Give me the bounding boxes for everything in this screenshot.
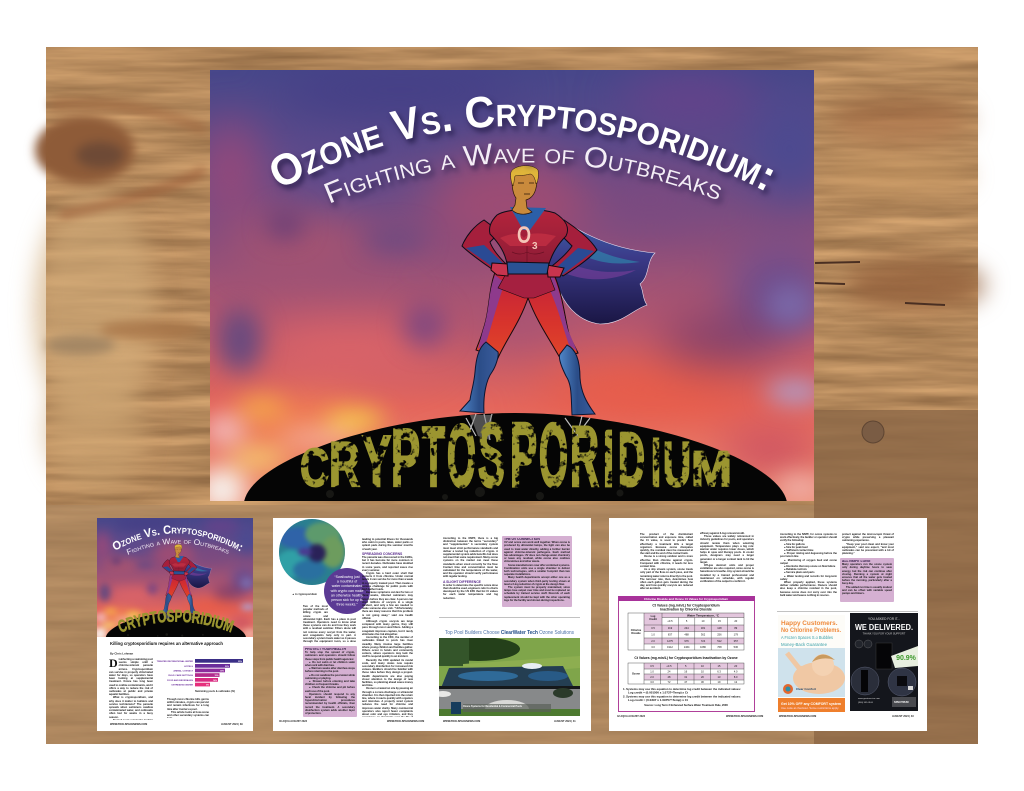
body text: second column with subheading: Although crypto oocysts are large compared with many germs, they still pass through most sand filters. Adding a coagulant improves capture, but it rarely eliminates the risk altogether. xyxy=(362,620,413,636)
subtitle: Fighting a Wave of Outbreaks xyxy=(324,144,724,208)
mound lettering: CRYPTOSPORIDIUM: O xyxy=(539,405,568,505)
callout circle xyxy=(324,568,370,614)
chlorine dioxide table: 179 xyxy=(734,632,739,636)
chlorine dioxide table: 637 xyxy=(668,632,673,636)
table notes xyxy=(623,687,741,707)
ozone table: 19 xyxy=(718,680,721,684)
pool advertisement xyxy=(435,617,580,718)
cover image: Fighting a Wave of Outbreaks xyxy=(126,538,229,555)
chlorine dioxide table: 256 xyxy=(717,632,722,636)
chlorine dioxide table: 3.0 xyxy=(651,645,655,649)
body text: right page column 2 xyxy=(842,533,894,555)
pool advertisement: Ozone Systems for Residential & Commercial Pools xyxy=(463,705,523,708)
spread 2: article pages 42 and 43 xyxy=(609,518,927,731)
advert: we delivered: www.greatservice.com xyxy=(858,697,880,700)
page footers: AUGUST 2024 | 41 xyxy=(554,720,576,723)
hero illustration: superhero standing on the Cryptosporidium mound xyxy=(210,70,814,505)
callout circle: person sick for up to xyxy=(331,598,363,602)
sidebar: protect your health: ● Wait two weeks after diarrhea stops before returning to the pool. xyxy=(305,667,355,673)
ozone table: 10 xyxy=(701,664,704,668)
body text: left page column 2: These values are widely referenced in industry guidelines for pools, and operators should review them when selecting equipment. Temperature plays a big role: warmer water requires lower doses, which helps in spas and therapy pools. In cooler pools, designers may need a larger generator or a longer contact tank to hit the target. xyxy=(700,535,754,564)
ozone table: 20 xyxy=(734,664,738,668)
chlorine dioxide table: 976 xyxy=(684,639,689,643)
body text: second column with subheading: Because symptoms can last for two or three weeks, infected swimmers may return before they are clear. A person can shed millions of oocysts in a single incident, and only a few are needed to make someone else sick. “Unfortunately, there are many reasons that this problem is not going away,” said one health official. xyxy=(362,591,413,620)
page footers: 42 AQUA AUGUST 2024 xyxy=(617,715,646,718)
bar chart: outbreak settings xyxy=(157,659,243,693)
chlorine dioxide table: 5 xyxy=(686,619,688,623)
mound lettering: CRYPTOSPORIDIUM: P xyxy=(391,412,420,504)
bar chart: outbreak settings: HOTELS xyxy=(184,666,194,668)
ozone table: 30 xyxy=(701,680,704,684)
advert: we delivered xyxy=(850,613,918,711)
body text: left page column 1 xyxy=(640,533,693,589)
body text: second column with subheading: leading to potential illness for thousands who swim in pools, lakes, water parks or splash pads during the summer months of each year. The parasite was discovered in the 1900s, but it has become far more common in recent decades. Outbreaks have doubled in some years, and reported cases rise every summer. xyxy=(362,538,413,572)
chlorine dioxide table: 536 xyxy=(734,645,739,649)
chlorine dioxide table: Water Temperature, °C xyxy=(687,613,720,617)
ozone table: 48 xyxy=(668,675,671,679)
body text: right page column 1: ● Size for peak load xyxy=(784,546,808,549)
body text: second column with subheading: SPREADING CONCERNS xyxy=(362,552,402,556)
sidebar: all night long: The added run time is usually modest and can be offset with variable speed pumps and timers. xyxy=(842,586,892,595)
photo caption: ▲ A cryptosporidium xyxy=(292,593,318,596)
sidebar: the UV connection: Many health departments accept either one as a secondary system when third-party testing shows at least a 3-log reduction of crypto at the design flow. xyxy=(504,576,570,586)
callout circle: with crypto can make xyxy=(331,589,363,593)
advert: we delivered: WE DELIVERED. xyxy=(855,622,913,632)
table notes: Log credit = (0.001506 x 1.0737^Temp) x Ct xyxy=(628,690,688,694)
body text: right page column 2: “Keep your pool clean and know your equipment,” said one expert, “and most outbreaks can be prevented with a bit of planning.” xyxy=(842,543,894,555)
sidebar: protect your health xyxy=(303,646,357,717)
page footers: AUGUST 2024 | 43 xyxy=(892,715,914,718)
title: Ozone Vs. Cryptosporidium: xyxy=(271,96,778,196)
chlorine dioxide table: Dioxide xyxy=(631,631,641,635)
chlorine dioxide table: Credit xyxy=(649,617,657,621)
page footers: WWW.POOLSPACENEWS.COM xyxy=(443,720,480,723)
mound lettering: CRYPTOSPORIDIUM: S xyxy=(478,405,505,505)
byline: By Chris Lohman xyxy=(110,652,133,656)
callout circle: water contaminated xyxy=(332,584,362,588)
body text: right page column 1: ● Water testing and records for long-term safety xyxy=(780,575,837,581)
body text: lower right column xyxy=(167,698,209,718)
chlorine dioxide table: 2.0 xyxy=(651,639,655,643)
page 1: magazine opening page xyxy=(97,518,253,731)
mound lettering: CRYPTOSPORIDIUM: P xyxy=(510,403,537,505)
pool advertisement: Top Pool Builders Choose ClearWater Tech Ozone Solutions xyxy=(445,630,574,636)
O3 chest emblem: O xyxy=(517,222,531,249)
chlorine dioxide table: 1275 xyxy=(667,639,673,643)
bar chart: outbreak settings: UNTREATED WATER xyxy=(171,684,193,686)
body text: left page column 1: Ozone is a strong oxidizer and is more effective than chlorine against crypto. Compared with chlorine, it needs far less contact time. xyxy=(640,555,693,568)
mound lettering: CRYPTOSPORIDIUM: C xyxy=(300,438,329,498)
body text: third column: A SLIGHT DIFFERENCE xyxy=(443,580,481,584)
ozone table: ≤0.5 xyxy=(666,664,672,668)
callout circle: three weeks.” xyxy=(336,603,358,607)
sidebar: protect your health: ● Check the chlorine and pH before each use of the pool. xyxy=(305,686,355,693)
Ct values table panel: Ct Values (mg.min/L) for Cryptosporidium Inactivation by Ozone xyxy=(634,656,738,660)
divider and advert: happy customers: Happy Customers. xyxy=(781,620,838,627)
chlorine dioxide table: 128 xyxy=(717,626,722,630)
body text: right page column 1: ● Reliable controls xyxy=(784,568,807,571)
advert: we delivered: SPECTRUM xyxy=(894,700,909,704)
divider and advert: happy customers: Money-Back Guarantee xyxy=(781,642,828,647)
chlorine dioxide table xyxy=(628,613,744,650)
page footers xyxy=(279,720,576,723)
bar chart: outbreak settings: 22% xyxy=(225,666,229,668)
mound lettering: CRYPTOSPORIDIUM: T xyxy=(422,409,445,504)
chlorine dioxide table: 357 xyxy=(734,639,739,643)
callout circle: a mouthful of xyxy=(337,580,357,584)
chlorine dioxide table: Log xyxy=(651,614,656,618)
cover image xyxy=(97,518,253,637)
table notes: Source: Long Term 2 Enhanced Surface Water Treatment Rule, 2006 xyxy=(644,703,728,707)
mound lettering: CRYPTOSPORIDIUM: I xyxy=(651,424,661,501)
divider and advert: happy customers: Get 10% OFF any COMFORT system xyxy=(781,701,841,706)
chlorine dioxide table: 10 xyxy=(702,619,705,623)
Ct values table panel: Inactivation by Chlorine Dioxide xyxy=(660,608,712,612)
body text: left page column 2: efficacy against 3-log removal credit. xyxy=(700,532,745,535)
ozone table: 24 xyxy=(668,670,671,674)
sidebar: protect your health: ● Do not swallow the pool water while swimming or playing. xyxy=(305,674,355,680)
page footer: AUGUST 2024 | 39 xyxy=(221,723,243,726)
cover image: Ozone Vs. Cryptosporidium: xyxy=(112,525,242,552)
advert: we delivered: 90.9% xyxy=(896,655,917,662)
body text: second column with subheading xyxy=(362,538,413,717)
ozone table: 8.0 xyxy=(734,675,738,679)
chlorine dioxide table: Chlorine xyxy=(631,628,642,632)
bar chart: outbreak settings: CHILD CARE SETTINGS xyxy=(168,674,194,677)
body text: lower right column: Though most chlorine kills germs within minutes, crypto can persist and remain infectious for a long time after it enters a pool. xyxy=(167,698,209,711)
table notes: 1. Systems may use this equation to determine log credit between the indicated values: xyxy=(623,687,741,691)
sidebar: the UV connection: Some manufacturers now offer combined systems. Combination units use a single chamber to deliver both technologies, with a smaller footprint than two separate installations. xyxy=(504,564,570,576)
divider and advert: happy customers: A Frozen Spaces S.o Bubbles xyxy=(781,635,834,640)
bar chart: outbreak settings: FOOD AND BEVERAGES xyxy=(167,679,194,682)
mound lettering: CRYPTOSPORIDIUM: R xyxy=(329,430,360,500)
body text: left page column 2 xyxy=(700,532,754,583)
divider and advert: happy customers: Use code at checkout. Some restrictions apply. xyxy=(781,707,839,710)
Ct values table panel xyxy=(618,596,755,712)
sidebar: all night long xyxy=(840,558,894,602)
mound lettering: CRYPTOSPORIDIUM xyxy=(300,403,732,505)
chlorine dioxide table: 362 xyxy=(701,632,706,636)
callout circle: “Swallowing just xyxy=(334,575,360,579)
cover image: CRYPTOSPORIDIUM xyxy=(118,610,234,633)
ozone table: 10 xyxy=(701,670,704,674)
body text: second column with subheading: Recently the CDC updated its model code, and many states now require secondary disinfection for increased risk venues. Builders should be familiar with those rules before they design a project. Health departments are also paying closer attention to the design of new facilities, so planning ahead saves money and time. xyxy=(362,659,413,687)
chlorine dioxide table: 20 xyxy=(734,619,738,623)
article headline: Killing cryptosporidium requires an alternative approach xyxy=(110,641,223,647)
divider and advert: happy customers: Clear Comfort xyxy=(796,687,816,691)
page footers: WWW.POOLSPACENEWS.COM xyxy=(779,715,816,718)
mound lettering: CRYPTOSPORIDIUM: M xyxy=(691,441,732,497)
chlorine dioxide table: ≤0.5 xyxy=(667,619,673,623)
sidebar: protect your health: To help stop the spread of crypto, swimmers and operators should follow these steps from public health agencies: xyxy=(305,651,355,661)
page footers: 40 AQUA AUGUST 2024 xyxy=(279,720,308,723)
bar chart: outbreak settings: 9% xyxy=(206,685,209,687)
sidebar: protect your health: ● Do not swim or let children swim when sick with diarrhea. xyxy=(305,661,355,667)
ozone table: 2.0 xyxy=(650,675,654,679)
chlorine dioxide table: 1.0 xyxy=(651,632,655,636)
bar chart: outbreak settings: TREATED RECREATIONAL WATER xyxy=(157,660,193,663)
chlorine dioxide table: 768 xyxy=(717,645,722,649)
body text: second column with subheading: According to the CDC, the number of outbreaks linked to pools has risen steadily. Many involve large facilities where young children and families gather. Others occur in hotels and community centers, where operators may lack the staff to respond quickly to an incident. xyxy=(362,636,413,658)
callout circle: an otherwise healthy xyxy=(331,593,363,597)
ozone table: 6.3 xyxy=(717,670,721,674)
ozone table: 15 xyxy=(718,664,721,668)
chlorine dioxide table: 488 xyxy=(684,632,689,636)
ozone table: 1.0 xyxy=(650,670,654,674)
body text: right page column 1: According to the NSPF, for ozone systems to work effectively, the builder or operator should verify the following: xyxy=(780,533,837,542)
mound lettering: CRYPTOSPORIDIUM: O xyxy=(447,407,476,505)
body text: right page column 1: ● Service plans and parts xyxy=(784,571,815,574)
chlorine dioxide table: 244 xyxy=(684,626,689,630)
bar chart: outbreak settings: 14% xyxy=(213,679,217,682)
ozone table: 16 xyxy=(684,670,688,674)
chlorine dioxide table: 1912 xyxy=(667,645,673,649)
body text: left page column 2: Off-gas destruct units and proper ventilation are also required, since ozone is hazardous to breathe. Any system should be installed by a trained professional and maintained on schedule, with regular verification of the output to confirm it. xyxy=(700,564,754,583)
body text: left column: isinfecting a swimming pool seems simple until a chlorine-tolerant parasite arrives. Cryptosporidium can survive in properly chlorinated water for days, so operators have been looking at supplemental treatment. Ozone has long been used to oxidize contaminants, and it offers a way to reduce the risk of outbreaks at public and private aquatic facilities. xyxy=(109,658,153,696)
Ct values table panel: Ct Values (mg.min/L) for Cryptosporidium xyxy=(652,604,720,608)
body text: right page column 1: ● Sufficient contact time xyxy=(784,549,814,552)
sidebar: protect your health: Operators should respond to any fecal incident by following the hyperchlorination procedures recommended by health officials, then record the treatment. A secondary disinfection system adds another layer of protection. xyxy=(305,693,355,715)
bar chart: outbreak settings: 15% xyxy=(214,675,219,677)
page footers: WWW.POOLSPACENEWS.COM xyxy=(726,715,763,718)
micrograph photo xyxy=(276,519,345,585)
divider and advert: happy customers xyxy=(777,611,918,712)
ozone table: 20 xyxy=(701,675,704,679)
page footer: WWW.POOLSPACENEWS.COM xyxy=(110,723,147,726)
sidebar: all night long: Many operators run the ozone system only during daytime hours to save energy, but the risk can continue after closing. Running a system at night ensures that all the water gets treated before the morning, particularly after a busy day. xyxy=(842,563,892,585)
body text: right page column 1: ● Interlocks that stop ozone on flow failure xyxy=(784,565,835,568)
body text: left column xyxy=(109,658,153,720)
body text: second column with subheading: Crypto has a hard outer shell that protects it from chlorine. Under normal levels it can survive for more than a week in a properly treated pool. That creates a serious challenge for public pools with high bather loads. xyxy=(362,572,413,591)
body text: left column: What is cryptosporidium, and why does it matter to builders and service technicians? The parasite spreads when swimmers swallow contaminated water, and outbreaks often last for weeks in a busy season. xyxy=(109,696,153,719)
sidebar: protect your health: ● Shower before entering and take children on frequent breaks. xyxy=(305,680,355,686)
ozone table: 3.0 xyxy=(650,680,654,684)
page footer xyxy=(110,723,243,726)
ozone table: 0.5 xyxy=(650,664,654,668)
table notes: 2. Systems may use this equation to determine log credit between the indicated values: xyxy=(623,694,741,698)
chlorine dioxide table: 89 xyxy=(734,626,738,630)
body text: left page column 1: The product of the disinfectant concentration and exposure time, called the Ct value, is used to predict how effectively a treatment kills a target organism. Because ozone dissipates quickly, the residual must be measured at the start and the end of the contact tank. xyxy=(640,533,693,555)
ozone table: 4.0 xyxy=(734,670,738,674)
mound lettering: CRYPTOSPORIDIUM: I xyxy=(603,415,614,504)
sidebar: the UV connection xyxy=(502,536,572,607)
bar chart: outbreak settings: Swimming pools & outbreaks (%) xyxy=(195,690,235,693)
body text: right page column 1: When properly applied, these systems deliver reliable performance. Owners should also keep a chlorine residual in the pool, because ozone does not carry over into the bulk water and leaves nothing in reserve. xyxy=(780,581,837,597)
chlorine dioxide table: 15 xyxy=(718,619,721,623)
Ct values table panel: Chlorine Dioxide and Ozone Ct Values for Cryptosporidium xyxy=(644,597,728,601)
advert: we delivered: (800) 555-0100 xyxy=(858,702,874,704)
chlorine dioxide table: 0.5 xyxy=(651,626,655,630)
chlorine dioxide table: 1086 xyxy=(700,645,706,649)
ozone table: 13 xyxy=(718,675,721,679)
mound lettering: CRYPTOSPORIDIUM: R xyxy=(570,410,599,505)
sidebar: the UV connection: UV and ozone can work well together. When ozone is produced by ultraviolet lamps, the light can also be used to treat water directly, adding a further barrier against chlorine-tolerant pathogens. Each method has advantages. UV does not change water chemistry or leave any residual, while ozone also oxidizes chloramines and other waste. xyxy=(504,541,570,563)
body text: third column: According to the NSPF, there is a big distinction between the terms “secondary” and “supplemental.” A secondary system must meet strict performance standards and deliver a tested log reduction of crypto. A supplemental system adds benefits but does not meet that same requirement. Many ozone systems on the market can meet these standards when sized correctly for the flow. Contact time and concentration must be calculated for the temperature of the water, and the operator should verify performance with regular testing. In order to determine the specific ozone dose that should be used, engineers refer to charts developed by the US EPA that list Ct values for each water temperature and log reduction. xyxy=(443,537,498,600)
bar chart: outbreak settings: 35% xyxy=(238,661,242,663)
ozone table: 12 xyxy=(734,680,738,684)
body text: right page column 1: ● Size for gallons xyxy=(784,543,805,546)
sidebar: the UV connection: The system must be properly maintained, since lamps lose output over time and must be replaced on schedule by trained service staff. Records of each replacement should be kept with the other operating logs for the facility and shown during inspections. xyxy=(504,586,570,602)
mound lettering: CRYPTOSPORIDIUM: Y xyxy=(362,422,391,502)
ozone table: 5 xyxy=(685,664,687,668)
ozone table: 72 xyxy=(668,680,671,684)
chlorine dioxide table: 1464 xyxy=(684,645,690,649)
mound lettering: CRYPTOSPORIDIUM: D xyxy=(618,417,645,504)
ozone table: 47 xyxy=(684,680,688,684)
page footers xyxy=(617,715,914,718)
body text: right page column 1 xyxy=(780,533,837,597)
divider and advert: happy customers: No Chlorine Problems. xyxy=(781,627,841,634)
O3 chest emblem: 3 xyxy=(532,241,538,252)
body text: right page column 1: ● Monitoring of oxygen feed and ozone output xyxy=(780,559,837,565)
body text: right page column 2: protect against the microscopic threat of crypto while preserving a pleasant swimming experience. xyxy=(842,533,894,542)
chlorine dioxide table: 319 xyxy=(668,626,673,630)
body text: right page column 1: ● Proper mixing and degassing before the pool return line xyxy=(780,552,837,558)
page footers: WWW.POOLSPACENEWS.COM xyxy=(387,720,424,723)
ozone table: 31 xyxy=(684,675,688,679)
bar chart: outbreak settings: 19% xyxy=(220,671,224,673)
ozone table: Ozone xyxy=(632,672,641,676)
mound lettering: CRYPTOSPORIDIUM: U xyxy=(663,430,691,500)
chlorine dioxide table: 512 xyxy=(717,639,722,643)
advert: we delivered: YOU ASKED FOR IT... xyxy=(868,617,900,621)
table notes: Log credit = (0.0397 x 1.09757^Temp) x Ct xyxy=(628,698,688,702)
ozone table xyxy=(628,663,744,684)
advert: we delivered: THANK YOU FOR YOUR SUPPORT xyxy=(863,632,906,636)
bar chart: outbreak settings: ANIMAL CONTACT xyxy=(173,670,194,672)
spread 1: article pages 40 and 41 xyxy=(273,518,591,731)
chlorine dioxide table: 181 xyxy=(701,626,706,630)
chlorine dioxide table: 724 xyxy=(701,639,706,643)
